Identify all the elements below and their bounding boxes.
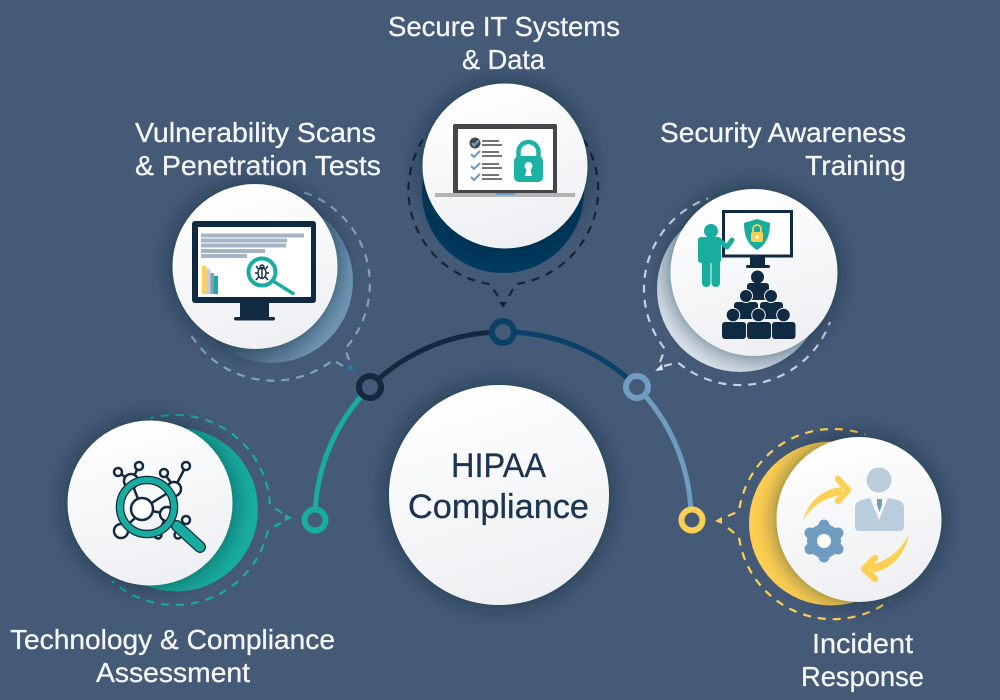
heading: Incident Response xyxy=(801,628,924,692)
heading: Secure IT Systems & Data: & Data xyxy=(462,44,545,75)
icon: monitor with bug scan xyxy=(192,221,316,320)
central arc timeline xyxy=(304,321,702,530)
heading: Security Awareness Training: Training xyxy=(805,150,906,181)
center circle: HIPAA Compliance: Compliance xyxy=(408,488,589,526)
heading: Technology & Compliance Assessment: Technology & Compliance xyxy=(10,624,335,655)
heading: Security Awareness Training xyxy=(660,117,906,181)
center circle: HIPAA Compliance xyxy=(389,385,609,605)
heading: Incident Response: Response xyxy=(801,661,924,692)
panel: vulnerability scans xyxy=(172,184,370,381)
icon: network under magnifier xyxy=(114,462,200,547)
heading: Technology & Compliance Assessment: Assessment xyxy=(96,657,250,688)
panel: incident response xyxy=(715,429,942,619)
panel: secure IT systems xyxy=(408,84,598,308)
panel: security awareness training xyxy=(644,189,838,385)
heading: Vulnerability Scans & Penetration Tests: & Penetration Tests xyxy=(135,150,381,181)
icon: laptop with checklist and lock xyxy=(435,124,575,197)
heading: Secure IT Systems & Data: Secure IT Systems xyxy=(388,11,620,42)
center circle: HIPAA Compliance: HIPAA xyxy=(451,447,546,485)
icon: person, gear and cycle arrows xyxy=(803,468,909,579)
heading: Secure IT Systems & Data xyxy=(388,11,620,75)
heading: Security Awareness Training: Security Awareness xyxy=(660,117,906,148)
heading: Incident Response: Incident xyxy=(812,628,913,659)
heading: Vulnerability Scans & Penetration Tests: Vulnerability Scans xyxy=(135,117,376,148)
icon: trainer, monitor and audience xyxy=(698,212,796,339)
panel: technology and compliance assessment xyxy=(68,415,292,605)
heading: Technology & Compliance Assessment xyxy=(10,624,335,688)
heading: Vulnerability Scans & Penetration Tests xyxy=(135,117,381,181)
